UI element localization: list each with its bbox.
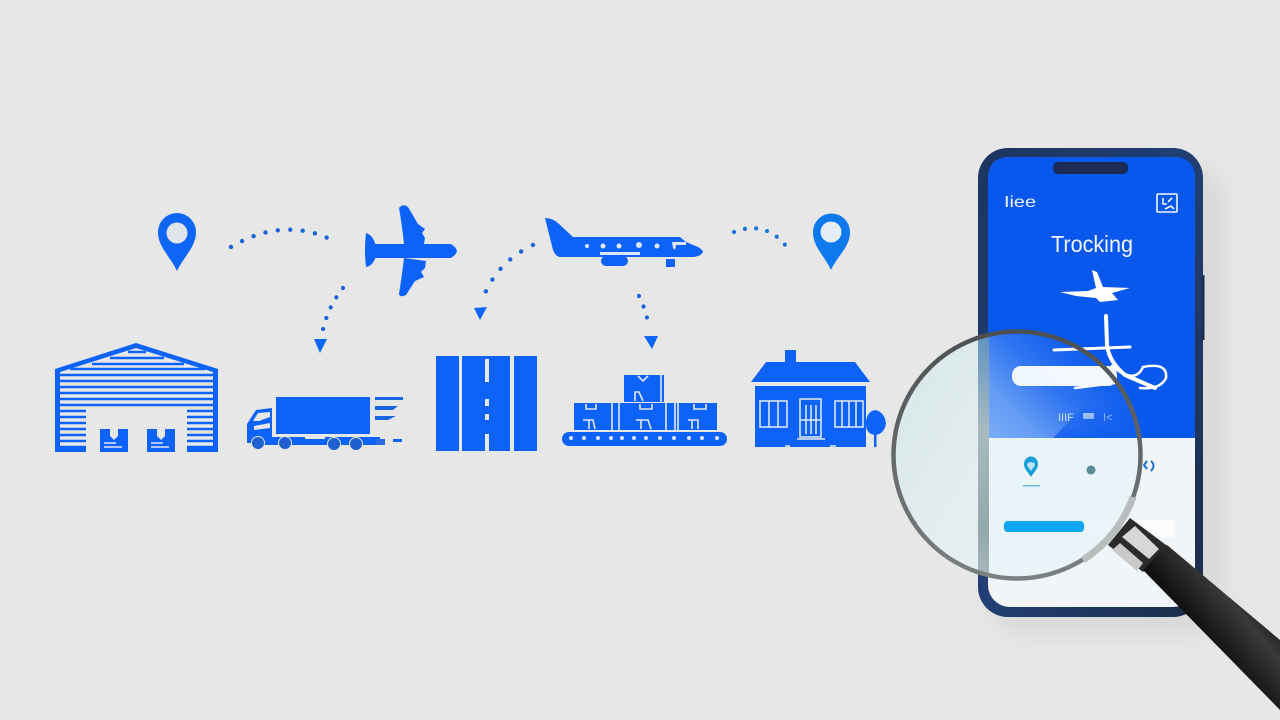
screen small status: I< [1103, 412, 1112, 424]
handle grip [1143, 545, 1280, 710]
icon: boxes on conveyor [562, 375, 727, 446]
icon: warehouse [55, 343, 218, 452]
icon: house [751, 350, 870, 447]
arrow: dotted route plane to road [474, 245, 533, 320]
handle collar [1108, 518, 1170, 572]
screen location icon [1023, 456, 1040, 486]
phone screen bottom panel [988, 157, 1195, 607]
screen plane small [1060, 270, 1130, 302]
screen title: Trocking [1051, 231, 1133, 257]
icon: tree [866, 410, 886, 447]
screen sound icon [1144, 461, 1154, 471]
screen small status: IIIF [1058, 412, 1074, 424]
screen label: Iiee [1004, 194, 1036, 211]
magnifier handle [1108, 518, 1280, 710]
phone side button [1202, 275, 1204, 340]
screen status icon [1086, 466, 1096, 474]
screen white field [1087, 520, 1175, 537]
icon: destination location pin [813, 214, 850, 270]
arrow: dotted route plane to truck [314, 288, 343, 353]
screen search field [1012, 366, 1117, 386]
icon: plane side view [545, 218, 703, 267]
arrow: dotted route plane to conveyor [639, 296, 658, 349]
magnifier lens [890, 330, 1145, 583]
arrow: dotted route origin to plane [231, 230, 336, 247]
arrow: dotted route plane to destination [734, 228, 786, 246]
screen action button [1004, 521, 1084, 532]
screen menu icon [1157, 194, 1177, 212]
phone notch [1053, 162, 1128, 174]
phone frame [978, 148, 1203, 617]
icon: road [436, 356, 537, 451]
magnifier rim [894, 332, 1140, 578]
screen small status [1058, 412, 1112, 424]
icon: origin location pin [158, 213, 196, 271]
icon: plane top view [365, 205, 457, 296]
phone [978, 148, 1204, 617]
phone shadow [990, 165, 1225, 635]
phone screen blue header [988, 157, 1195, 438]
icon: delivery truck [247, 397, 403, 450]
screen plane large [1054, 316, 1166, 388]
